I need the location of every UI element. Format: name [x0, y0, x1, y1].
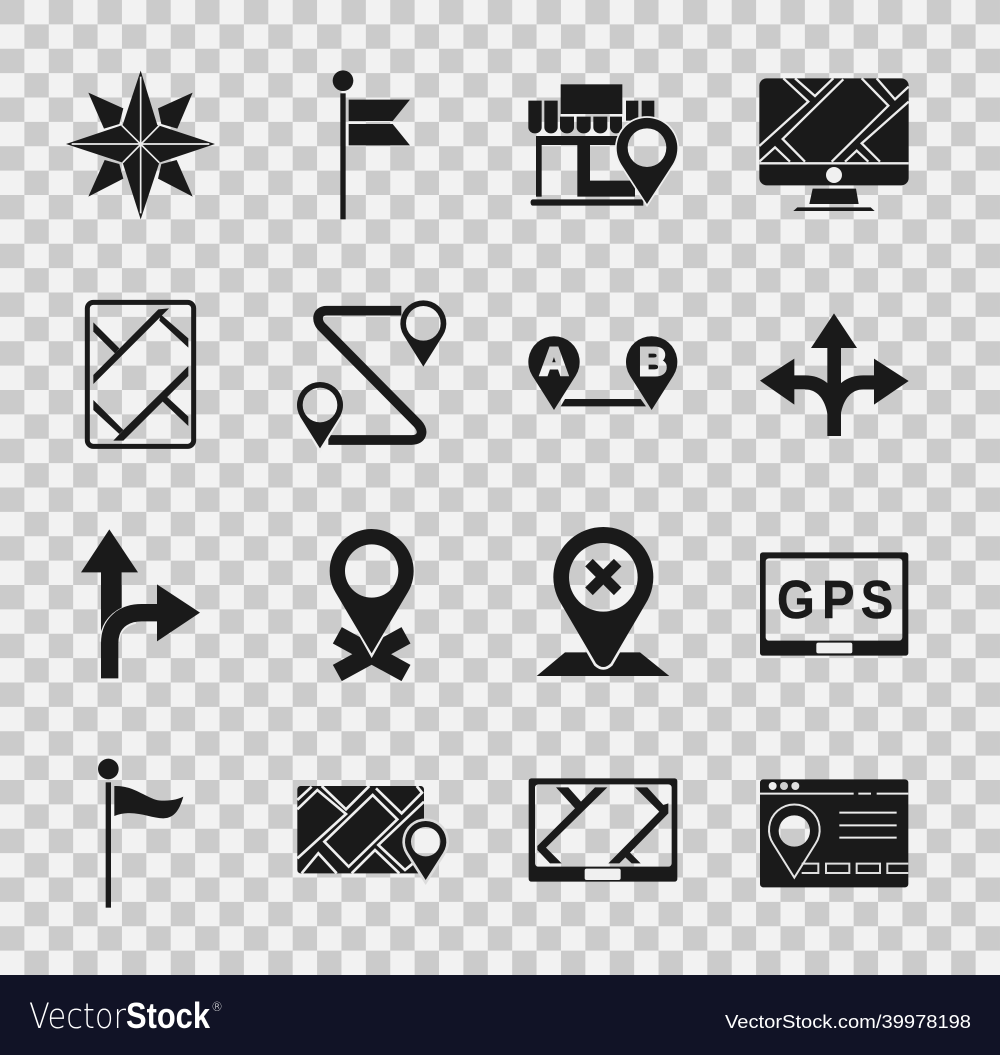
icon: straight or turn right arrow: [81, 529, 200, 678]
icon: paper map outline: [87, 302, 194, 446]
icon: location pin over crossed marks: [330, 529, 414, 673]
icon: shop with location pin: [528, 84, 677, 206]
icon: winding route between two pins: [297, 300, 446, 450]
icon: GPS tablet: [760, 552, 908, 656]
footer: VectorStock logo: [29, 995, 223, 1037]
icon: A to B route pins: A: [540, 341, 568, 384]
footer: image id: VectorStock.com/39978198: [725, 1012, 971, 1032]
footer: VectorStock logo: Vector: [29, 997, 127, 1037]
icon: compass rose: [66, 71, 215, 219]
icon: GPS tablet: GPS: [777, 569, 893, 630]
footer bar: [0, 975, 1000, 1055]
icon: waving flag on pole: [98, 759, 183, 908]
icon: three-way direction arrow: [760, 313, 909, 436]
icon: navigation tablet with map: [529, 778, 677, 882]
icon: A to B route pins: [528, 336, 677, 410]
footer: VectorStock logo: Stock: [126, 995, 211, 1036]
footer: VectorStock logo: ®: [211, 1000, 223, 1014]
icon: A to B route pins: B: [639, 341, 667, 384]
icon: browser window with location pin: [760, 779, 908, 887]
icon: desktop monitor with map: [759, 78, 909, 211]
icon: location pin with cross on map base: [537, 527, 669, 676]
icon: street map with pin: [297, 786, 446, 880]
icon: pennant flag on pole: [333, 70, 410, 219]
